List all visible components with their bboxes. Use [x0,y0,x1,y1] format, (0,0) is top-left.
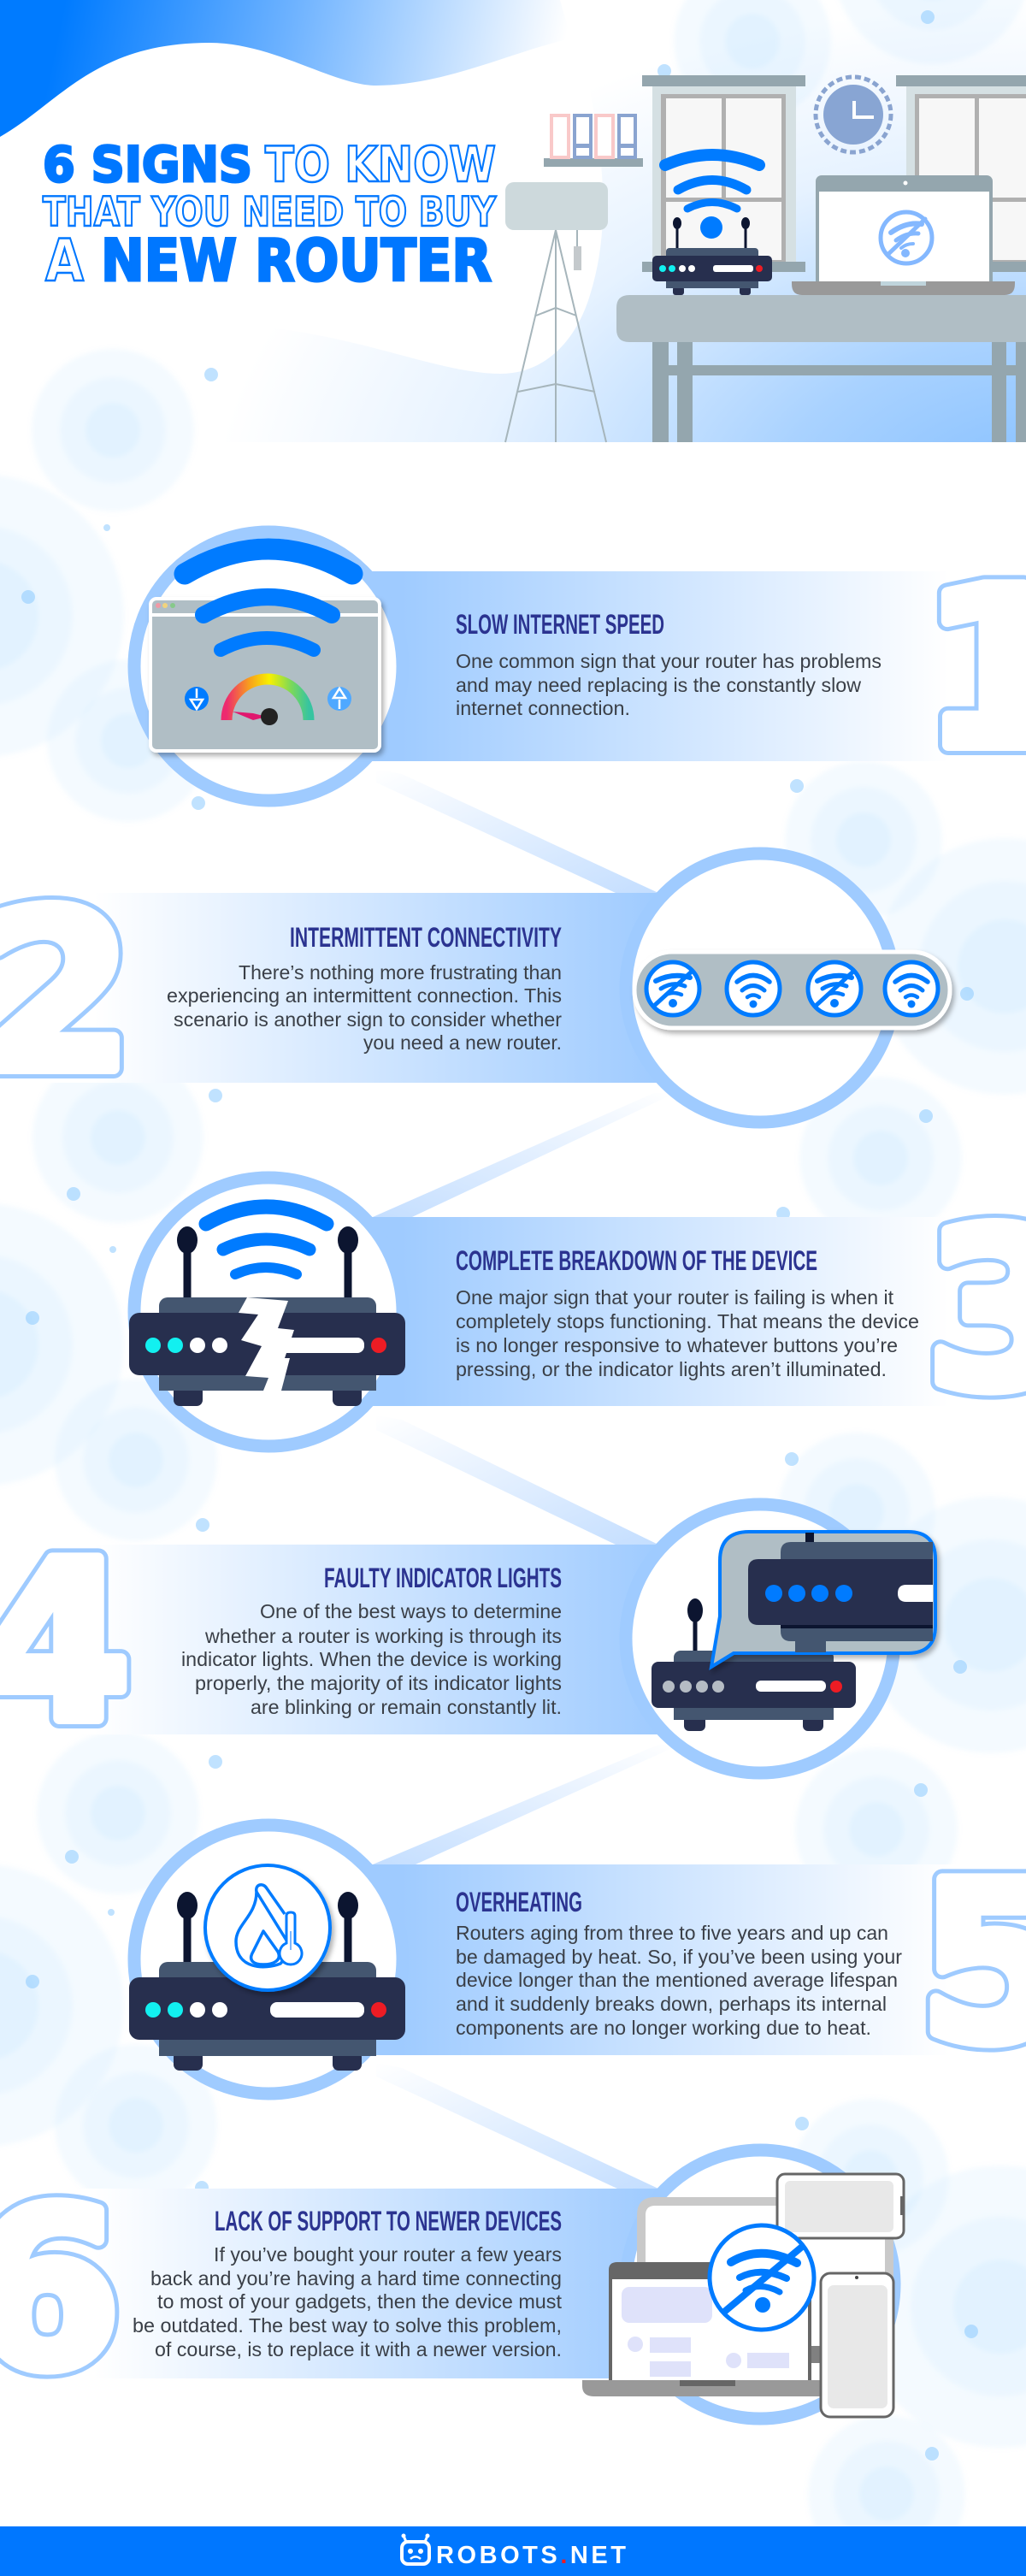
heading 1: SLOW INTERNET SPEED [456,609,664,640]
title: 6 SIGNS [43,137,252,193]
panel 1 [342,571,1026,761]
title: A [45,227,84,295]
text block 4: properly, the majority of its indicator lights [195,1672,562,1694]
header background [0,0,1026,442]
text block 4: are blinking or remain constantly lit. [251,1696,562,1718]
text block 2: scenario is another sign to consider whether [174,1008,562,1031]
connector 5 to 6 [376,2063,658,2189]
text block 6: to most of your gadgets, then the device must [157,2290,562,2313]
icon: left window [642,75,805,272]
text block 5: components are no longer working due to heat. [456,2017,871,2039]
text block 1 [456,650,882,719]
text block 5 [456,1922,902,2039]
callout: zoomed router lights [711,1532,935,1667]
text block 5: Routers aging from three to five years and up can [456,1922,888,1944]
text block 4: One of the best ways to determine [260,1600,562,1622]
heading 2: INTERMITTENT CONNECTIVITY [290,922,562,953]
text block 1: internet connection. [456,697,630,719]
panel 5 [342,1864,1026,2055]
text block 2: you need a new router. [363,1031,562,1054]
header illustration: room [505,75,1026,442]
ring 6 [626,2150,894,2419]
text block 6: be outdated. The best way to solve this problem, [133,2314,562,2337]
icon: tablet [777,2174,905,2238]
section 1: slow internet speed [134,532,1026,801]
text block 4: whether a router is working is through its [204,1625,562,1647]
text block 2: experiencing an intermittent connection. This [167,984,562,1007]
section 4: faulty indicator lights [0,1504,935,1773]
ring 3 [134,1178,403,1446]
heading 4: FAULTY INDICATOR LIGHTS [324,1563,562,1593]
text block 6: If you’ve bought your router a few years [214,2243,562,2266]
text block 4 [181,1600,562,1718]
connector 1 to 2 [376,770,658,893]
icon: no wifi badge [710,2225,814,2330]
icon row: wifi status pill [634,952,950,1028]
connector 3 to 4 [376,1415,658,1545]
icon: header router [652,217,772,295]
icon: browser window with speed gauge [150,549,380,751]
heading 3: COMPLETE BREAKDOWN OF THE DEVICE [456,1245,817,1276]
text block 5: device longer than the mentioned average lifespan [456,1969,898,1991]
icon: clock [816,77,891,152]
heading 6: LACK OF SUPPORT TO NEWER DEVICES [215,2206,562,2236]
icon: wifi signal [665,155,759,239]
text block 6: of course, is to replace it with a newer version. [155,2338,562,2360]
icon: laptop [582,2262,829,2396]
ring 2 [626,854,894,1122]
section 3: complete breakdown [129,1178,1026,1446]
icon: robot logo [402,2533,429,2564]
text block 3: is no longer responsive to whatever buttons you’re [456,1334,898,1356]
text block 6: back and you’re having a hard time connecting [150,2267,562,2289]
icon: floor lamp [505,182,608,442]
text block 3: completely stops functioning. That means the device [456,1310,919,1332]
icon: phone [821,2273,893,2417]
ring 5 [134,1825,403,2094]
heading 5: OVERHEATING [456,1887,582,1917]
text block 5: be damaged by heat. So, if you’ve been using your [456,1946,902,1968]
ring 4 [626,1504,894,1773]
text block 6 [133,2243,562,2360]
connector 2 to 3 [373,1093,675,1217]
title: NEW ROUTER [101,227,492,295]
text block 4: indicator lights. When the device is working [181,1648,562,1670]
section 6: lack of support [0,2150,905,2419]
panel 2 [0,893,684,1083]
text block 1: and may need replacing is the constantly slow [456,674,862,696]
text block 3: One major sign that your router is failing is when it [456,1286,893,1309]
title: TO KNOW [265,137,496,193]
connector 4 to 5 [373,1745,680,1864]
text block 3 [456,1286,919,1380]
logo text: ROBOTS.NET [436,2542,626,2569]
panel 3 [342,1217,1026,1406]
text block 5: and it suddenly breaks down, perhaps its internal [456,1993,887,2015]
text block 2: There’s nothing more frustrating than [239,961,562,984]
icon: laptop with no wifi [792,175,1015,295]
text block 2 [167,961,562,1054]
icon: router with indicator lights [652,1598,856,1731]
section 2: intermittent connectivity [0,854,950,1122]
text block 1: One common sign that your router has problems [456,650,882,672]
panel 4 [0,1545,684,1734]
title: THAT YOU NEED TO BUY [43,189,497,236]
icon: table [616,295,1026,442]
icon: shelf with books [544,115,643,167]
icon: devices [582,2174,905,2417]
icon: right window [896,75,1026,272]
icon: overheating router [129,1865,405,2071]
ring 1 [134,532,403,801]
icon: monitor [637,2197,893,2386]
panel 6 [0,2189,684,2378]
text block 3: pressing, or the indicator lights aren’t illuminated. [456,1358,887,1380]
footer [0,2526,1026,2576]
section 5: overheating [129,1825,1026,2094]
icon: broken router [129,1207,405,1406]
title [43,137,497,295]
